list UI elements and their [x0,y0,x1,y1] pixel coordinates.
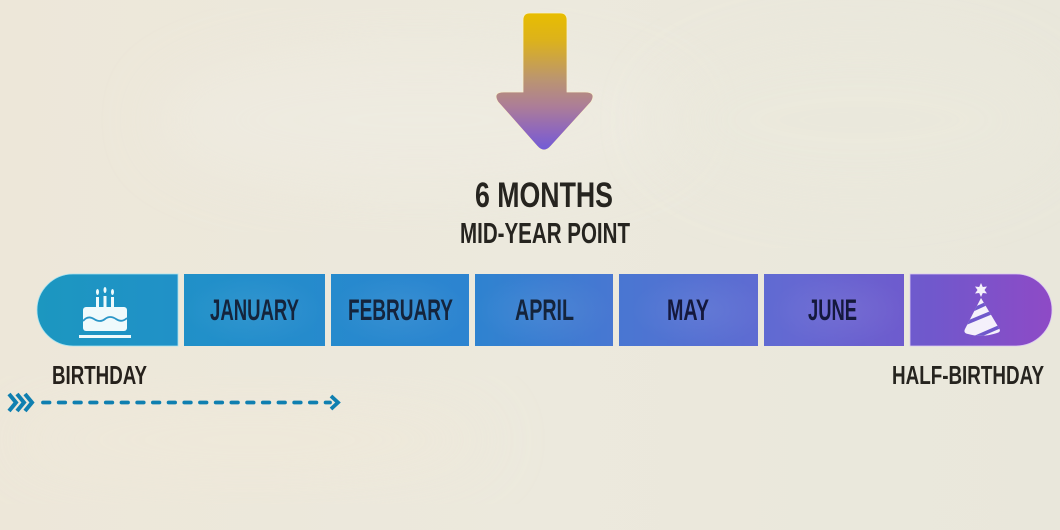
icon: down arrow [496,13,593,150]
segment: may [619,274,769,346]
segment: june: JUNE [808,294,857,327]
subheading: mid-year point: MID-YEAR POINT [460,218,630,250]
segment: april [475,274,613,346]
icon: party hat [964,283,1000,336]
icon: triple chevrons [9,394,32,411]
segment: birthday [37,274,178,346]
segment: february [331,274,469,346]
infographic canvas [8,13,1052,412]
heading: 6 months: 6 MONTHS [475,176,613,215]
segment: june [764,274,910,346]
segment: may: MAY [667,294,709,327]
segment: april: APRIL [515,294,574,327]
segment: january: JANUARY [210,294,299,327]
segment: january [184,274,325,346]
arrow: dashed progress [43,396,338,409]
icon: birthday cake [79,287,131,338]
segment: february: FEBRUARY [348,294,453,327]
label: birthday: BIRTHDAY [52,360,147,390]
timeline bar [37,274,1052,346]
segment: half-birthday [910,274,1052,346]
